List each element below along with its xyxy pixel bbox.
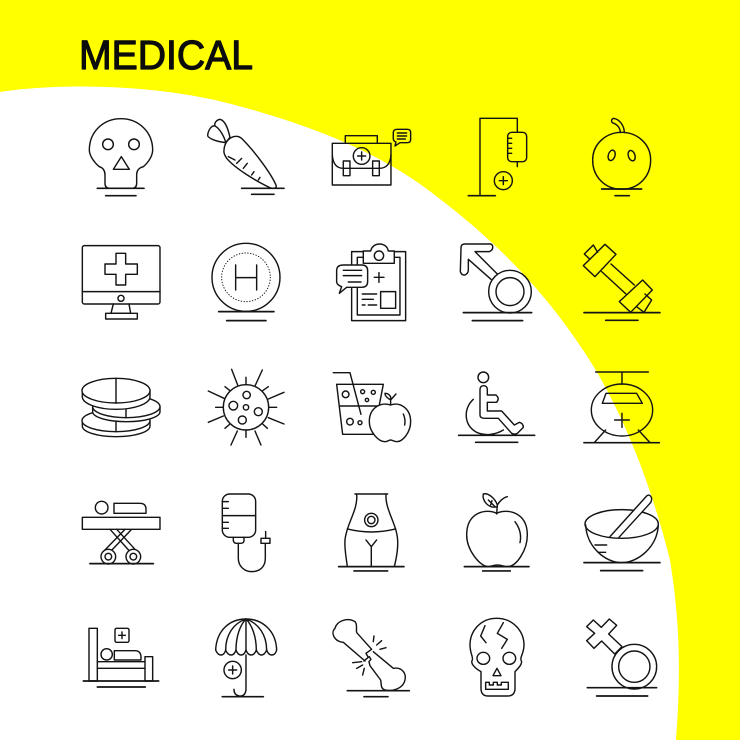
icon: broken bone — [333, 620, 409, 697]
icon: virus — [208, 369, 284, 445]
icon: monitor with cross — [82, 246, 160, 319]
icon: dumbbell — [583, 244, 660, 320]
icon: hospital coin — [212, 243, 280, 321]
icon: juice glass and apple — [333, 373, 411, 442]
icon: carrot — [208, 119, 284, 194]
icon: umbrella — [216, 619, 277, 697]
icon: IV bag — [222, 494, 270, 572]
icon: female symbol — [587, 619, 657, 696]
icon grid — [82, 118, 660, 697]
icon: IV stand — [468, 118, 527, 196]
icon: female torso — [339, 494, 404, 571]
icon: cracked skull — [470, 618, 524, 696]
icon: wheelchair — [459, 372, 535, 442]
icon: skull — [89, 119, 153, 196]
icon: stretcher — [82, 501, 160, 564]
icon: hospital bed — [83, 628, 159, 687]
icon: male symbol — [460, 244, 532, 321]
icon: pumpkin — [593, 118, 651, 196]
icon: medical bag with speech bubble — [332, 129, 411, 185]
icon: apple — [464, 494, 529, 571]
icon: clipboard with chat — [337, 244, 406, 321]
icon: stacked pills — [82, 378, 160, 437]
icon: ambulance pod — [584, 372, 659, 443]
title: MEDICAL — [79, 32, 253, 78]
icon: mortar and pestle — [584, 495, 660, 571]
